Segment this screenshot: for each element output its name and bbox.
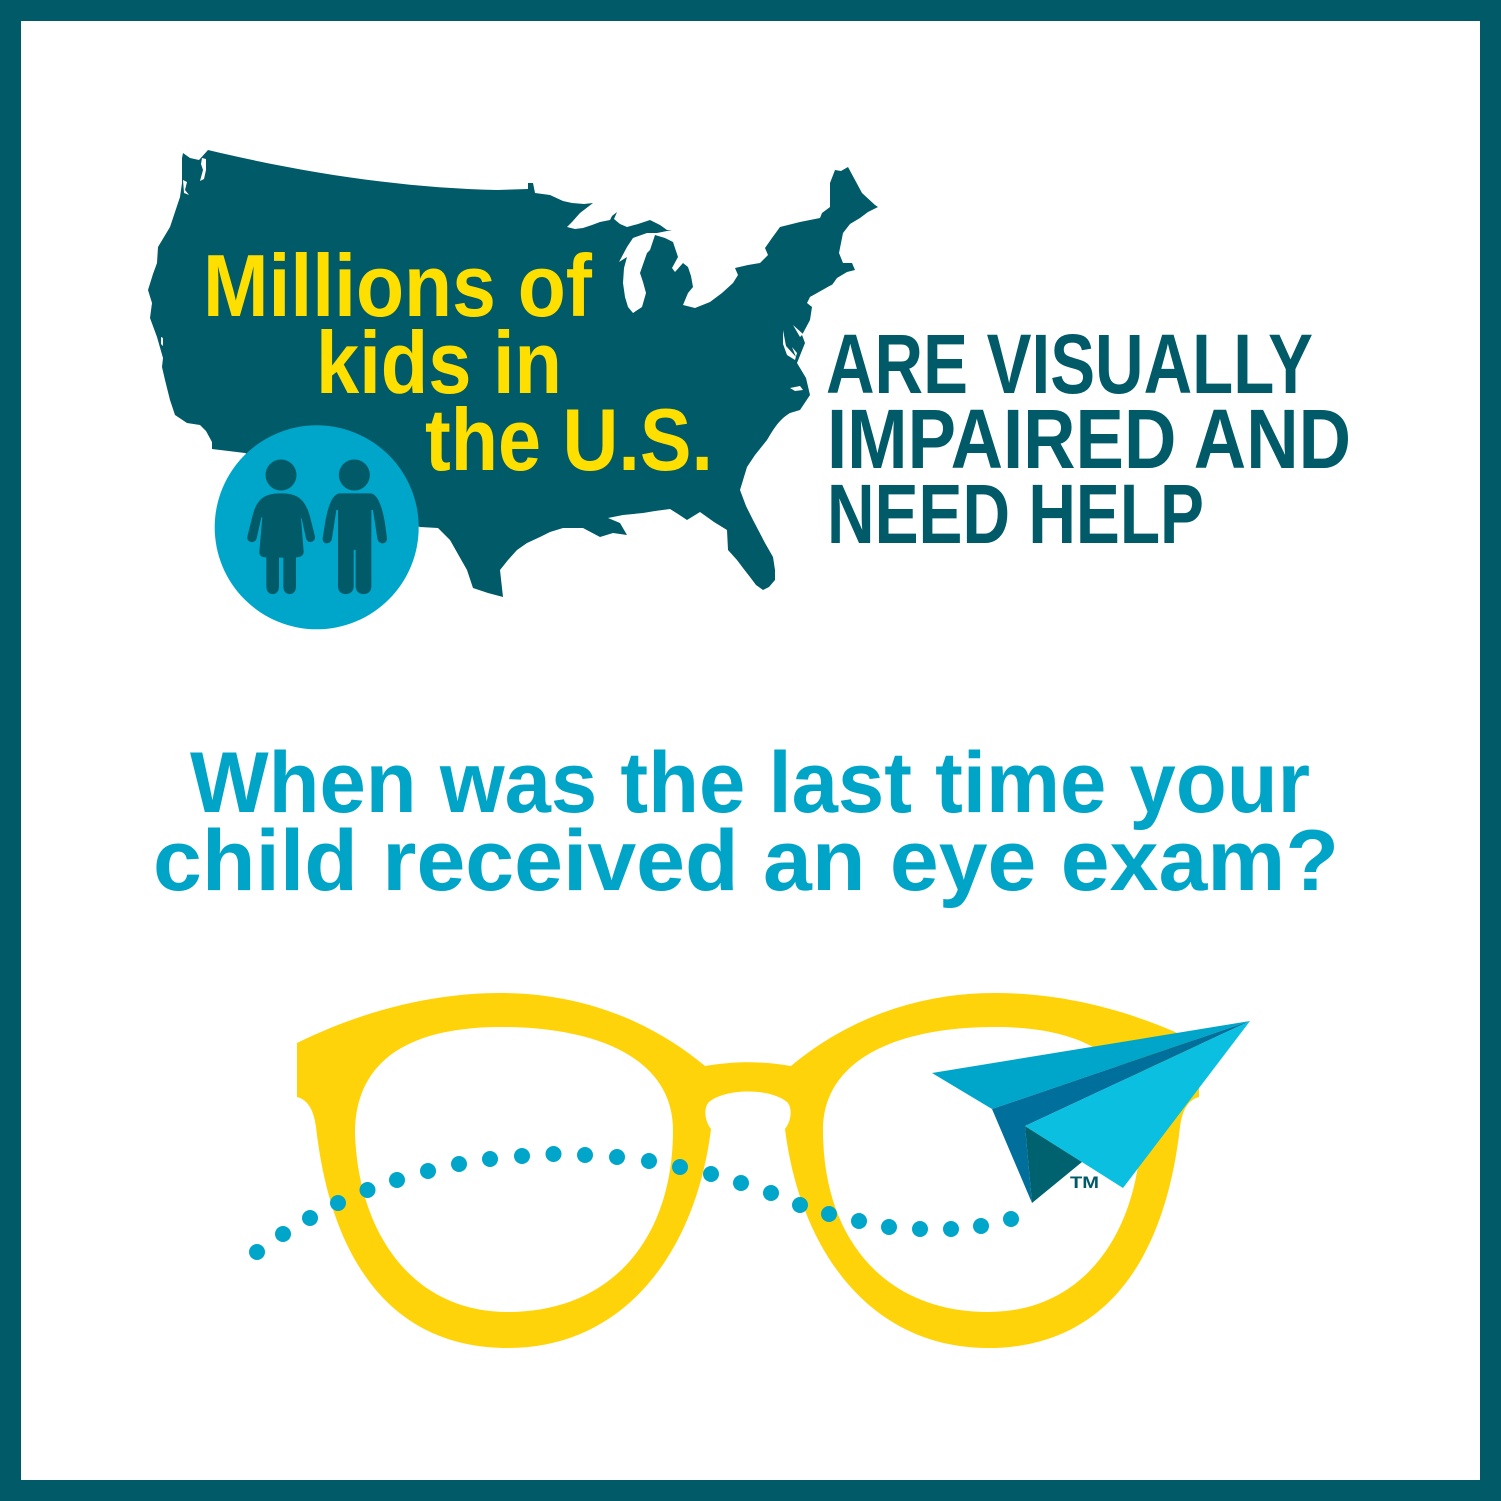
icon: paper airplane (932, 1021, 1250, 1203)
map details: sounds and bays (161, 158, 833, 391)
question: when was the last time your child received an eye exam (153, 735, 1339, 909)
yellow heading: Millions of kids in the U.S.: Millions of (203, 236, 593, 335)
question: when was the last time your child received an eye exam: When was the last time your (190, 735, 1310, 831)
yellow glasses (297, 993, 1199, 1348)
statement: are visually impaired and need help: ARE VISUALLY (826, 317, 1313, 411)
statement: are visually impaired and need help: IMPAIRED AND (827, 392, 1351, 486)
yellow heading: Millions of kids in the U.S.: kids in (316, 313, 562, 412)
dotted flight path (249, 1146, 1019, 1260)
trademark symbol: TM (1070, 1173, 1099, 1192)
yellow heading: Millions of kids in the U.S. (203, 236, 713, 489)
statement: are visually impaired and need help: NEED HELP (827, 467, 1204, 561)
statement: are visually impaired and need help (826, 317, 1351, 561)
icon: two children in blue circle (215, 425, 419, 629)
map of the United States (148, 150, 878, 597)
yellow heading: Millions of kids in the U.S.: the U.S. (425, 390, 713, 489)
question: when was the last time your child received an eye exam: child received an eye exam? (153, 813, 1339, 909)
